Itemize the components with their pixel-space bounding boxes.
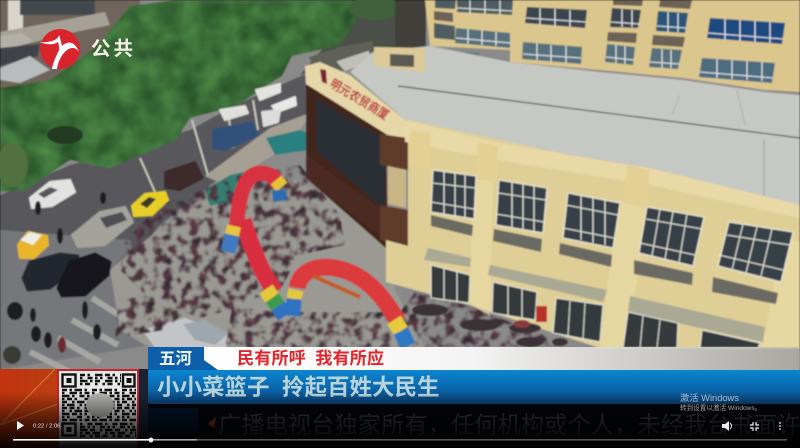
yellow car [132,192,168,216]
tree trunks [140,100,258,192]
play icon [17,421,24,430]
windows activation watermark: 激活 Windows [680,392,739,403]
channel logo [40,29,80,69]
pedestrians on the road [3,192,106,364]
sidewalk [205,112,312,185]
place name: 五河 [159,349,192,368]
volume icon [722,421,732,431]
time: 0:22 / 2:06 [33,424,60,430]
dark wall with LED screen [306,84,388,250]
red box by door [536,306,547,322]
white truck [142,318,232,348]
fullscreen exit icon [750,422,759,431]
upper building [425,0,800,92]
doors [431,265,760,348]
yellow taxi [18,232,48,258]
parked vehicles along road [165,42,372,190]
inflatable arch two [293,267,408,346]
road [0,72,330,300]
distant street behind trees [300,0,400,75]
parapet [405,120,800,218]
lower third: blue headline bar [148,370,800,404]
trees [0,0,401,192]
ticker text: 广播电视台独家所有，任何机构或个人，未经我台书面许 [218,412,800,438]
white car [30,180,75,208]
headline: 小小菜篮子 拎起百姓大民生 [157,375,440,400]
silver van [72,207,133,247]
scrubber [149,438,153,442]
dark cars [23,254,110,296]
QR code [59,371,137,448]
windows activation watermark [680,392,761,412]
inflatable arch one [228,173,285,316]
lower third: blue tab [148,347,218,371]
red QR panel [0,369,148,448]
forecourt motorbikes in front of building [412,304,568,347]
channel name: 公共 [91,38,136,60]
awnings [424,248,765,342]
crowd and motorbikes [115,165,572,348]
green tarps [205,130,312,206]
sign band: 明元农贸商厦 [327,76,392,123]
crosswalk stripes [30,298,130,372]
plaza [110,175,425,348]
brown wall panels [380,134,408,246]
buffered [150,439,197,441]
lower third: white slogan bar [204,347,800,370]
sign band [305,62,405,140]
video player controls [13,421,787,442]
more menu icon [779,422,781,430]
played [13,439,151,441]
facade dark panels [431,215,778,304]
progress track [197,439,787,441]
facade windows [431,170,793,282]
windows activation watermark: 转到设置以激活 Windows。 [680,403,761,412]
slogan: 民有所呼 我有所应 [237,348,384,368]
ticker band [148,404,800,448]
left buildings [0,0,140,90]
main facade [386,120,800,348]
roof box [374,47,425,72]
player bottom gradient [0,392,800,448]
roof [350,46,800,206]
background behind upper building [395,0,426,50]
